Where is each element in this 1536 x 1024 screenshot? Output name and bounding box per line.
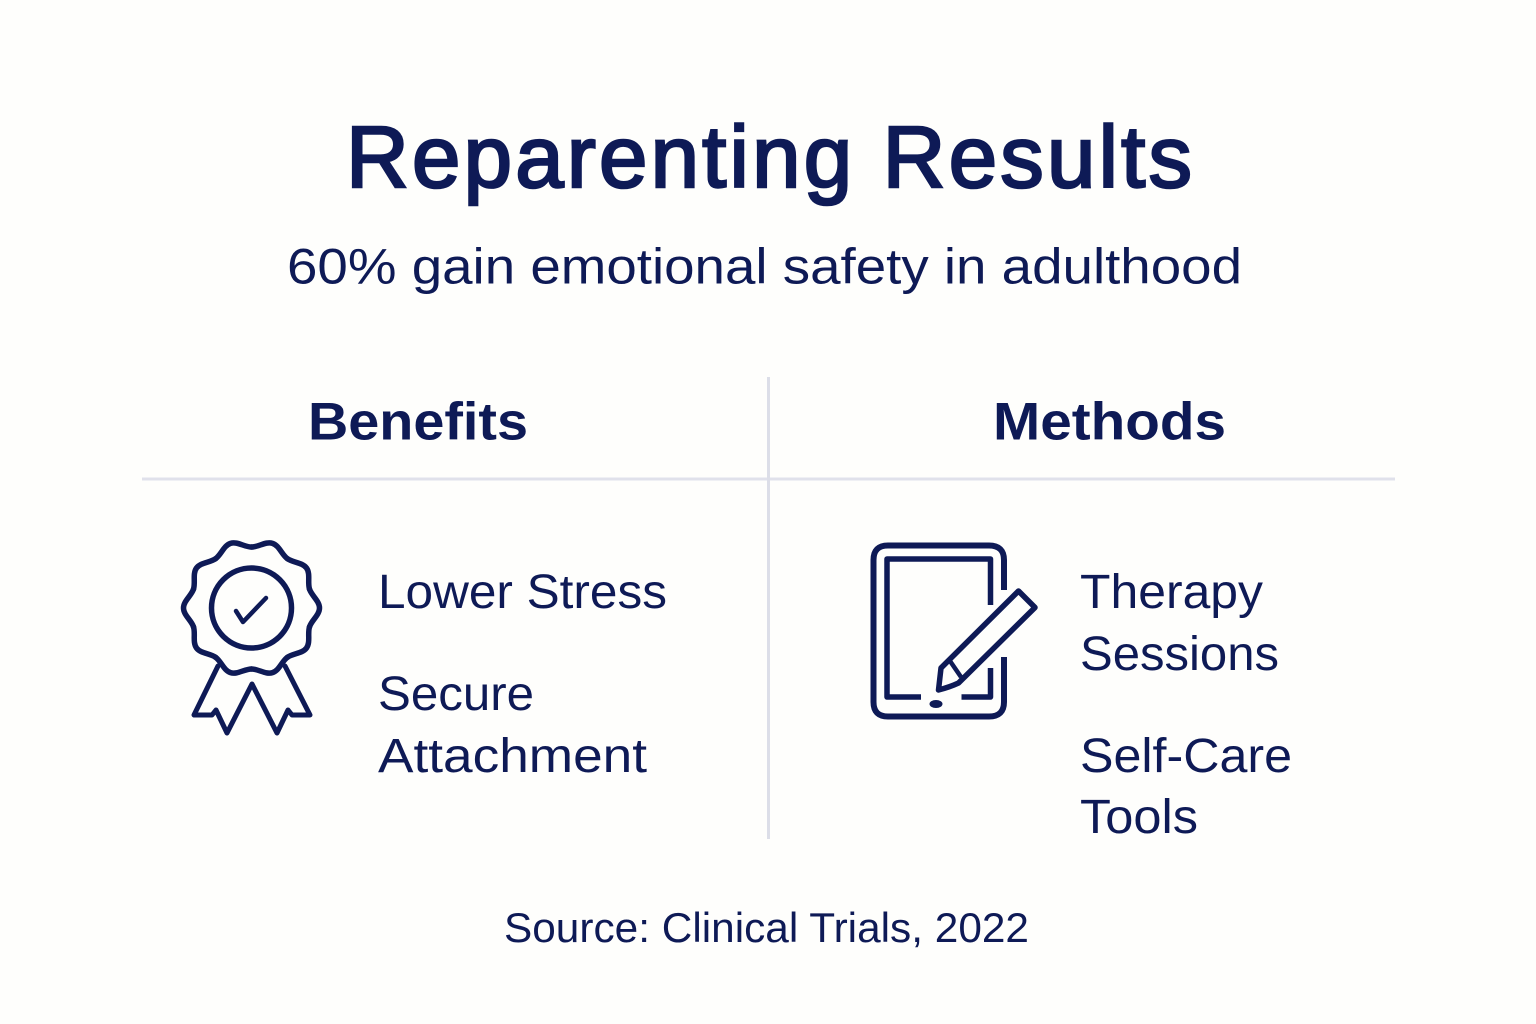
icon: award rosette with check bbox=[184, 538, 320, 733]
list: methods: Tools bbox=[1080, 791, 1198, 844]
heading: benefits: Benefits bbox=[308, 392, 528, 452]
list: methods: Self-Care bbox=[1080, 730, 1292, 783]
list: benefits bbox=[378, 566, 667, 783]
icon: tablet with pencil bbox=[874, 546, 1035, 716]
list: methods: Sessions bbox=[1080, 628, 1279, 681]
list: methods bbox=[1080, 566, 1292, 844]
list: benefits: Secure bbox=[378, 668, 534, 721]
subtitle: 60% gain emotional safety in adulthood bbox=[287, 238, 1242, 294]
source note: Source: Clinical Trials, 2022 bbox=[504, 904, 1029, 951]
heading: methods: Methods bbox=[993, 392, 1226, 452]
list: methods: Therapy bbox=[1080, 566, 1263, 619]
list: benefits: Lower Stress bbox=[378, 566, 667, 619]
title: Reparenting Results bbox=[346, 109, 1192, 206]
list: benefits: Attachment bbox=[378, 730, 647, 783]
